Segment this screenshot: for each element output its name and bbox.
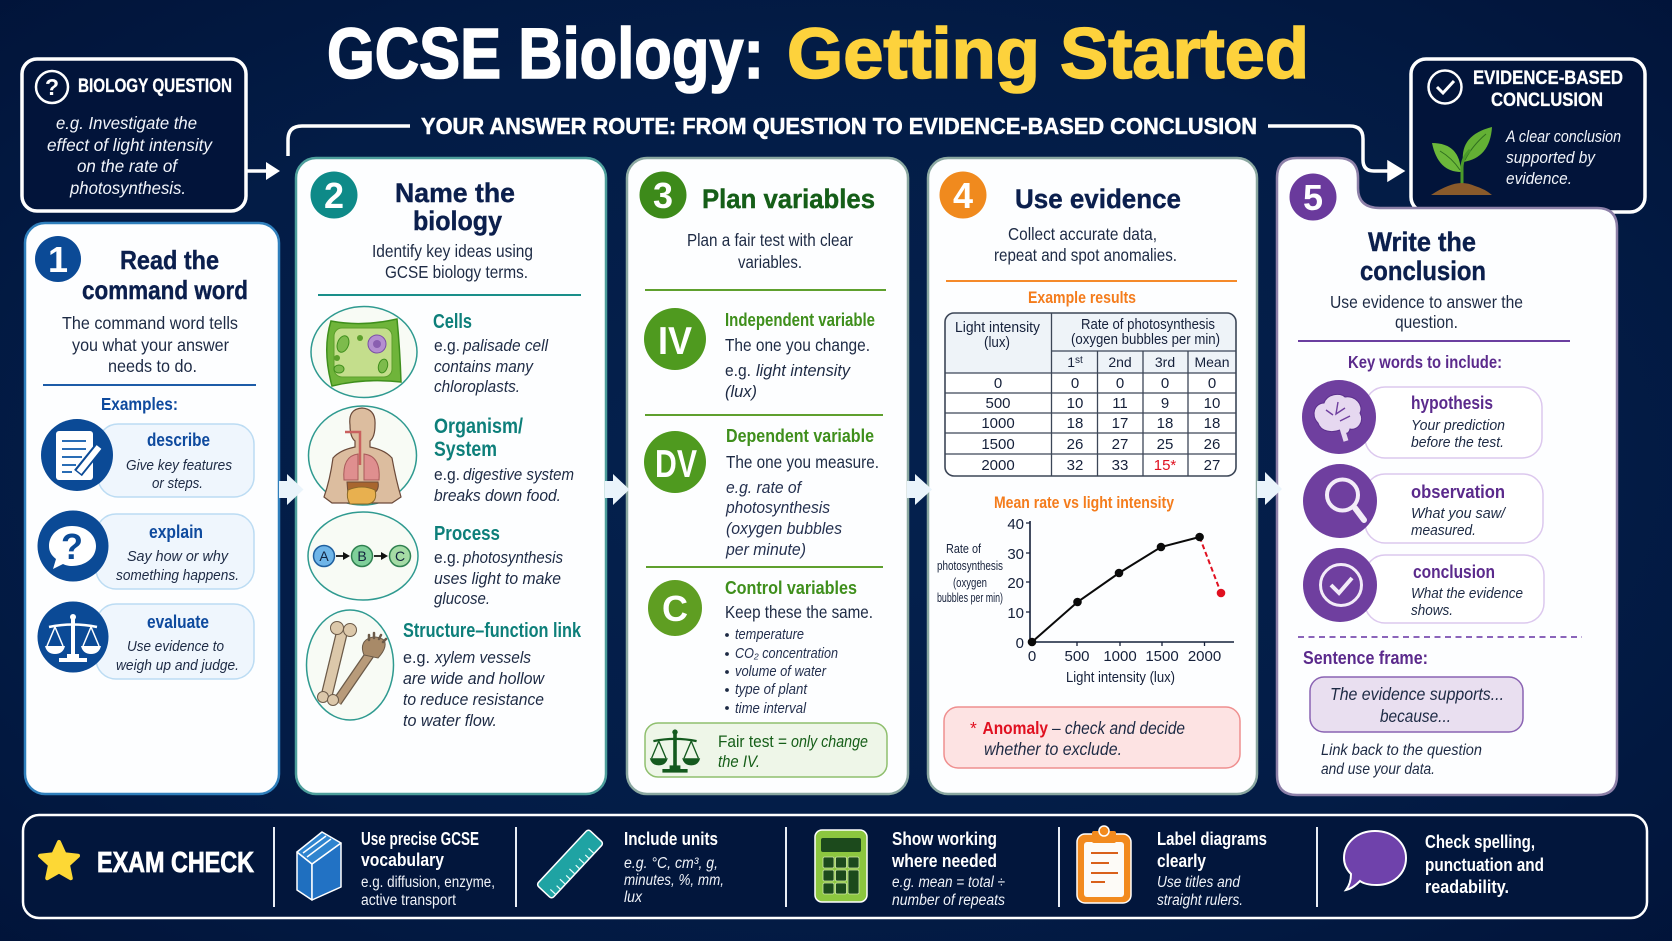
heading: evidence-based conclusion bbox=[1473, 67, 1623, 111]
tip: vocabulary: e.g. diffusion, enzyme, bbox=[361, 874, 495, 891]
panel 5: write the conclusion bbox=[1277, 158, 1617, 795]
results table: 0 bbox=[1116, 375, 1124, 392]
results table: 2nd bbox=[1108, 354, 1132, 370]
item: process: uses light to make bbox=[434, 569, 561, 588]
item: process: C bbox=[395, 548, 405, 564]
card: observation bbox=[1303, 464, 1543, 543]
tip: diagrams: Label diagrams bbox=[1157, 829, 1267, 849]
text: intro: needs to do. bbox=[108, 356, 197, 376]
text: conclusion description: evidence. bbox=[1506, 169, 1572, 188]
tip: proofreading: readability. bbox=[1425, 877, 1509, 897]
step number 1: 1 bbox=[48, 239, 68, 280]
item: dependent variable: DV bbox=[655, 443, 697, 486]
text: link back: and use your data. bbox=[1321, 761, 1435, 778]
item: process: photosynthesis bbox=[462, 548, 563, 567]
card: observation: measured. bbox=[1411, 522, 1476, 539]
heading: write the conclusion bbox=[1360, 227, 1486, 286]
item: control variables: Control variables bbox=[725, 578, 857, 598]
arrow: panel 1 to 2 bbox=[279, 474, 304, 505]
line chart: 0 bbox=[1028, 648, 1036, 665]
text: intro bbox=[1330, 292, 1523, 332]
heading: write the conclusion: conclusion bbox=[1360, 256, 1486, 286]
results table: 1000 bbox=[981, 415, 1015, 432]
tip: units bbox=[536, 829, 724, 906]
text: intro: Collect accurate data, bbox=[1008, 224, 1157, 244]
step number 2: 2 bbox=[324, 175, 344, 216]
step number 5: 5 bbox=[1303, 177, 1323, 218]
tip: working: Show working bbox=[892, 829, 997, 849]
tip: diagrams: straight rulers. bbox=[1157, 892, 1243, 909]
item: dependent variable: Dependent variable bbox=[726, 426, 874, 446]
text: link back: Link back to the question bbox=[1321, 742, 1482, 759]
item: independent variable: Independent variable bbox=[725, 310, 875, 330]
item: dependent variable bbox=[644, 426, 879, 559]
item: process: B bbox=[357, 548, 367, 564]
text: intro: Identify key ideas using bbox=[372, 241, 533, 261]
item: organism system: Organism/ bbox=[434, 415, 523, 438]
results table: 10 bbox=[1204, 395, 1220, 412]
card: hypothesis: before the test. bbox=[1411, 434, 1504, 451]
item: process: A bbox=[319, 548, 329, 564]
text: intro bbox=[372, 241, 533, 282]
callout: fair test: the IV. bbox=[718, 753, 760, 771]
callout: anomaly: * bbox=[970, 718, 977, 738]
text: conclusion description: A clear conclusion bbox=[1505, 127, 1621, 146]
tip: vocabulary: vocabulary bbox=[361, 850, 444, 870]
item: independent variable: (lux) bbox=[725, 382, 757, 401]
results table: 0 bbox=[994, 375, 1002, 392]
heading: evidence-based conclusion: EVIDENCE-BASED bbox=[1473, 67, 1623, 89]
results table: 11 bbox=[1112, 395, 1128, 412]
results table: st bbox=[1075, 355, 1083, 366]
item: control variables: CO₂ concentration bbox=[735, 646, 838, 662]
title: Getting Started bbox=[787, 15, 1309, 94]
text: intro: repeat and spot anomalies. bbox=[994, 245, 1177, 265]
item: control variables: temperature bbox=[735, 627, 804, 643]
results table: Mean bbox=[1194, 354, 1230, 370]
item: independent variable: IV bbox=[658, 320, 692, 363]
heading: chart title: Mean rate vs light intensity bbox=[994, 494, 1175, 512]
item: organism system: breaks down food. bbox=[434, 486, 561, 505]
results table: 15* bbox=[1154, 457, 1176, 474]
heading: evidence-based conclusion: CONCLUSION bbox=[1491, 89, 1603, 111]
step number 3: 3 bbox=[653, 175, 673, 216]
text: intro: Plan a fair test with clear bbox=[687, 230, 853, 250]
card: explain: ? bbox=[61, 526, 83, 567]
heading: key words: Key words to include: bbox=[1348, 352, 1502, 372]
tip: vocabulary bbox=[297, 829, 495, 909]
icon: question mark: ? bbox=[45, 74, 59, 100]
heading: name the biology: Name the bbox=[395, 178, 515, 208]
item: dependent variable: e.g. rate of bbox=[726, 478, 803, 497]
heading: plan variables: Plan variables bbox=[702, 184, 875, 214]
results table: 3rd bbox=[1155, 354, 1175, 370]
arrow: panel 4 to 5 bbox=[1257, 472, 1282, 505]
line chart: photosynthesis bbox=[937, 558, 1003, 573]
arrow: question to panel 2 bbox=[246, 162, 280, 180]
results table: 26 bbox=[1204, 436, 1220, 453]
item: structure-function link: e.g. bbox=[403, 648, 430, 667]
panel 2: name the biology bbox=[296, 158, 606, 794]
item: organism system: e.g. bbox=[434, 465, 460, 484]
tip: working bbox=[815, 829, 1005, 909]
heading: biology question: BIOLOGY QUESTION bbox=[78, 75, 232, 97]
heading: write the conclusion: Write the bbox=[1368, 227, 1476, 257]
item: organism system: System bbox=[434, 438, 497, 461]
item: cells: Cells bbox=[433, 311, 472, 333]
callout: anomaly: whether to exclude. bbox=[984, 739, 1122, 759]
results table: 27 bbox=[1112, 436, 1128, 453]
callout: fair test bbox=[645, 723, 887, 777]
heading: examples: Examples: bbox=[101, 394, 178, 414]
text: question example: e.g. Investigate the bbox=[56, 113, 197, 133]
card: hypothesis: Your prediction bbox=[1411, 417, 1505, 434]
card: conclusion bbox=[1303, 548, 1544, 623]
card: conclusion: shows. bbox=[1411, 602, 1453, 619]
icon: question mark bbox=[36, 71, 68, 103]
card: hypothesis bbox=[1302, 380, 1542, 458]
callout: sentence frame: The evidence supports... bbox=[1330, 684, 1504, 704]
item: dependent variable: (oxygen bubbles bbox=[726, 519, 842, 538]
item: organism system bbox=[308, 406, 574, 505]
item: dependent variable: The one you measure. bbox=[726, 452, 879, 472]
tip: diagrams: Use titles and bbox=[1157, 874, 1241, 891]
item: control variables: time interval bbox=[735, 701, 807, 717]
line chart: 500 bbox=[1064, 648, 1090, 665]
results table: Light intensity bbox=[955, 320, 1041, 336]
exam check bar bbox=[23, 815, 1647, 918]
icon: star bbox=[40, 842, 78, 878]
item: structure-function link: are wide and hollow bbox=[403, 669, 546, 688]
icon: seedling bbox=[1431, 127, 1492, 195]
icon: check circle bbox=[1428, 70, 1462, 104]
item: independent variable bbox=[644, 308, 875, 401]
text: intro: Use evidence to answer the bbox=[1330, 292, 1523, 312]
text: intro: variables. bbox=[738, 252, 802, 272]
item: independent variable: The one you change. bbox=[725, 335, 870, 355]
text: question example: on the rate of bbox=[77, 156, 179, 176]
card: evaluate bbox=[38, 602, 254, 679]
line chart bbox=[937, 516, 1234, 686]
item: control variables: type of plant bbox=[735, 682, 808, 698]
line chart: 2000 bbox=[1188, 648, 1221, 665]
line chart: 1000 bbox=[1103, 648, 1137, 665]
heading: use evidence: Use evidence bbox=[1015, 184, 1181, 214]
tip: units: minutes, %, mm, bbox=[624, 872, 724, 889]
results table: 500 bbox=[985, 395, 1011, 412]
panel: evidence-based conclusion bbox=[1411, 59, 1645, 212]
step number 4 bbox=[940, 172, 986, 218]
tip: vocabulary: Use precise GCSE bbox=[361, 829, 479, 849]
text: intro bbox=[687, 230, 853, 272]
heading: exam check: EXAM CHECK bbox=[97, 847, 254, 879]
line chart: 40 bbox=[1007, 516, 1024, 533]
results table: 18 bbox=[1204, 415, 1220, 432]
results table: 2000 bbox=[981, 457, 1015, 474]
results table: (lux) bbox=[984, 335, 1010, 351]
card: explain bbox=[38, 510, 254, 589]
item: cells: chloroplasts. bbox=[434, 377, 520, 396]
text: intro bbox=[62, 313, 238, 376]
item: process: Process bbox=[434, 523, 500, 545]
step number 3 bbox=[640, 172, 686, 218]
card: observation: What you saw/ bbox=[1411, 505, 1507, 522]
card: describe: or steps. bbox=[152, 475, 203, 492]
panel 1: read the command word bbox=[25, 223, 279, 794]
text: link back bbox=[1321, 742, 1482, 778]
item: cells: contains many bbox=[434, 357, 534, 376]
tip: proofreading: Check spelling, bbox=[1425, 832, 1535, 852]
title: GCSE Biology: bbox=[327, 15, 764, 94]
step number 2 bbox=[310, 172, 358, 218]
card: evaluate: weigh up and judge. bbox=[116, 657, 239, 674]
panel: biology question bbox=[22, 59, 246, 211]
text: intro: GCSE biology terms. bbox=[385, 262, 528, 282]
callout: sentence frame: because... bbox=[1380, 706, 1451, 726]
tip: proofreading bbox=[1344, 831, 1544, 897]
text: intro: you what your answer bbox=[72, 335, 229, 355]
item: structure-function link: xylem vessels bbox=[434, 648, 531, 667]
heading: read the command word: command word bbox=[82, 275, 248, 305]
tip: working: e.g. mean = total ÷ bbox=[892, 874, 1005, 891]
item: process: e.g. bbox=[434, 548, 460, 567]
item: dependent variable: photosynthesis bbox=[725, 498, 830, 517]
results table: 17 bbox=[1112, 415, 1128, 432]
text: question example: effect of light intensity bbox=[47, 135, 213, 155]
callout: anomaly bbox=[944, 707, 1240, 768]
tip: units: lux bbox=[624, 889, 643, 906]
heading: read the command word: Read the bbox=[120, 245, 219, 275]
item: cells bbox=[311, 306, 549, 398]
item: independent variable: e.g. bbox=[725, 361, 751, 380]
results table: 0 bbox=[1161, 375, 1169, 392]
results table: 9 bbox=[1161, 395, 1169, 412]
card: evaluate: evaluate bbox=[147, 611, 209, 632]
line chart: 0 bbox=[1016, 635, 1024, 652]
tip: units: Include units bbox=[624, 829, 718, 849]
tip: working: where needed bbox=[891, 851, 997, 871]
panel 3: plan variables bbox=[627, 158, 908, 794]
line chart: bubbles per min) bbox=[937, 590, 1003, 605]
results table: 1500 bbox=[981, 436, 1015, 453]
item: cells: e.g. bbox=[434, 336, 460, 355]
card: explain: explain bbox=[149, 521, 203, 542]
results table: 10 bbox=[1067, 395, 1083, 412]
heading: sentence frame: Sentence frame: bbox=[1303, 648, 1428, 668]
item: structure-function link bbox=[306, 610, 582, 730]
line chart: 1500 bbox=[1145, 648, 1179, 665]
results table: 33 bbox=[1112, 457, 1128, 474]
results table bbox=[945, 313, 1236, 476]
text: intro bbox=[994, 224, 1177, 265]
callout: fair test: only change bbox=[791, 733, 868, 751]
item: control variables: volume of water bbox=[735, 664, 827, 680]
line chart: Light intensity (lux) bbox=[1066, 670, 1175, 686]
item: control variables: C bbox=[662, 588, 688, 629]
results table: 25 bbox=[1157, 436, 1173, 453]
tip: working: number of repeats bbox=[892, 892, 1005, 909]
step number 1 bbox=[35, 236, 81, 282]
results table: 18 bbox=[1067, 415, 1083, 432]
item: control variables: Keep these the same. bbox=[725, 602, 873, 622]
route heading: YOUR ANSWER ROUTE: FROM QUESTION TO EVIDENCE-BASED CONCLUSION bbox=[421, 113, 1257, 139]
card: explain: Say how or why bbox=[127, 548, 229, 565]
text: question example: photosynthesis. bbox=[69, 178, 186, 198]
item: independent variable: light intensity bbox=[756, 361, 851, 380]
item: structure-function link: to reduce resistance bbox=[403, 690, 544, 709]
line chart: 30 bbox=[1007, 546, 1024, 563]
line chart: (oxygen bbox=[953, 575, 987, 590]
step number 5 bbox=[1290, 174, 1336, 220]
heading: example results: Example results bbox=[1028, 289, 1136, 307]
tip: vocabulary: active transport bbox=[361, 892, 457, 909]
card: describe: describe bbox=[147, 429, 210, 450]
results table: (oxygen bubbles per min) bbox=[1071, 332, 1220, 348]
tip: units: e.g. °C, cm³, g, bbox=[624, 855, 718, 872]
text: intro: question. bbox=[1395, 312, 1458, 332]
item: organism system: digestive system bbox=[463, 465, 574, 484]
card: describe: Give key features bbox=[126, 457, 232, 474]
item: structure-function link: to water flow. bbox=[403, 711, 497, 730]
panel 4: use evidence bbox=[928, 158, 1257, 794]
results table: 32 bbox=[1067, 457, 1083, 474]
results table: 27 bbox=[1204, 457, 1220, 474]
text: intro: The command word tells bbox=[62, 313, 238, 333]
arrow: route end to conclusion bbox=[1268, 126, 1402, 179]
card: evaluate: Use evidence to bbox=[127, 638, 224, 655]
callout: sentence frame bbox=[1310, 677, 1523, 732]
line chart: 10 bbox=[1007, 605, 1024, 622]
arrow: panel 2 to 3 bbox=[605, 474, 630, 505]
step number 4: 4 bbox=[953, 175, 973, 216]
results table: 0 bbox=[1071, 375, 1079, 392]
card: hypothesis: hypothesis bbox=[1411, 393, 1493, 413]
text: question example bbox=[47, 113, 213, 198]
arrow: route start bbox=[288, 126, 410, 156]
heading: name the biology bbox=[395, 178, 515, 236]
callout: anomaly: Anomaly bbox=[982, 718, 1048, 738]
card: explain: something happens. bbox=[116, 567, 239, 584]
title bbox=[327, 15, 1309, 94]
line chart: Rate of bbox=[946, 541, 981, 556]
card: conclusion: conclusion bbox=[1413, 562, 1495, 582]
results table: 26 bbox=[1067, 436, 1083, 453]
text: conclusion description: supported by bbox=[1506, 148, 1596, 167]
item: process: glucose. bbox=[434, 589, 490, 608]
results table: 1 bbox=[1067, 354, 1075, 370]
results table: 18 bbox=[1157, 415, 1173, 432]
tip: diagrams bbox=[1077, 826, 1267, 909]
results table: 0 bbox=[1208, 375, 1216, 392]
card: observation: observation bbox=[1411, 482, 1505, 502]
heading: read the command word bbox=[82, 245, 248, 305]
tip: diagrams: clearly bbox=[1157, 851, 1206, 871]
heading: name the biology: biology bbox=[413, 206, 502, 236]
callout: anomaly: – check and decide bbox=[1051, 718, 1185, 738]
arrow: panel 3 to 4 bbox=[907, 474, 932, 505]
card: describe bbox=[41, 419, 254, 497]
line chart: 20 bbox=[1007, 575, 1024, 592]
item: control variables bbox=[648, 578, 873, 717]
callout: fair test: Fair test = bbox=[718, 733, 787, 751]
item: structure-function link: Structure–function link bbox=[403, 620, 582, 642]
text: conclusion description bbox=[1505, 127, 1621, 188]
tip: proofreading: punctuation and bbox=[1425, 855, 1544, 875]
results table: Rate of photosynthesis bbox=[1081, 317, 1215, 333]
item: process bbox=[308, 512, 563, 608]
card: conclusion: What the evidence bbox=[1411, 585, 1523, 602]
item: dependent variable: per minute) bbox=[725, 540, 806, 559]
item: cells: palisade cell bbox=[462, 336, 549, 355]
